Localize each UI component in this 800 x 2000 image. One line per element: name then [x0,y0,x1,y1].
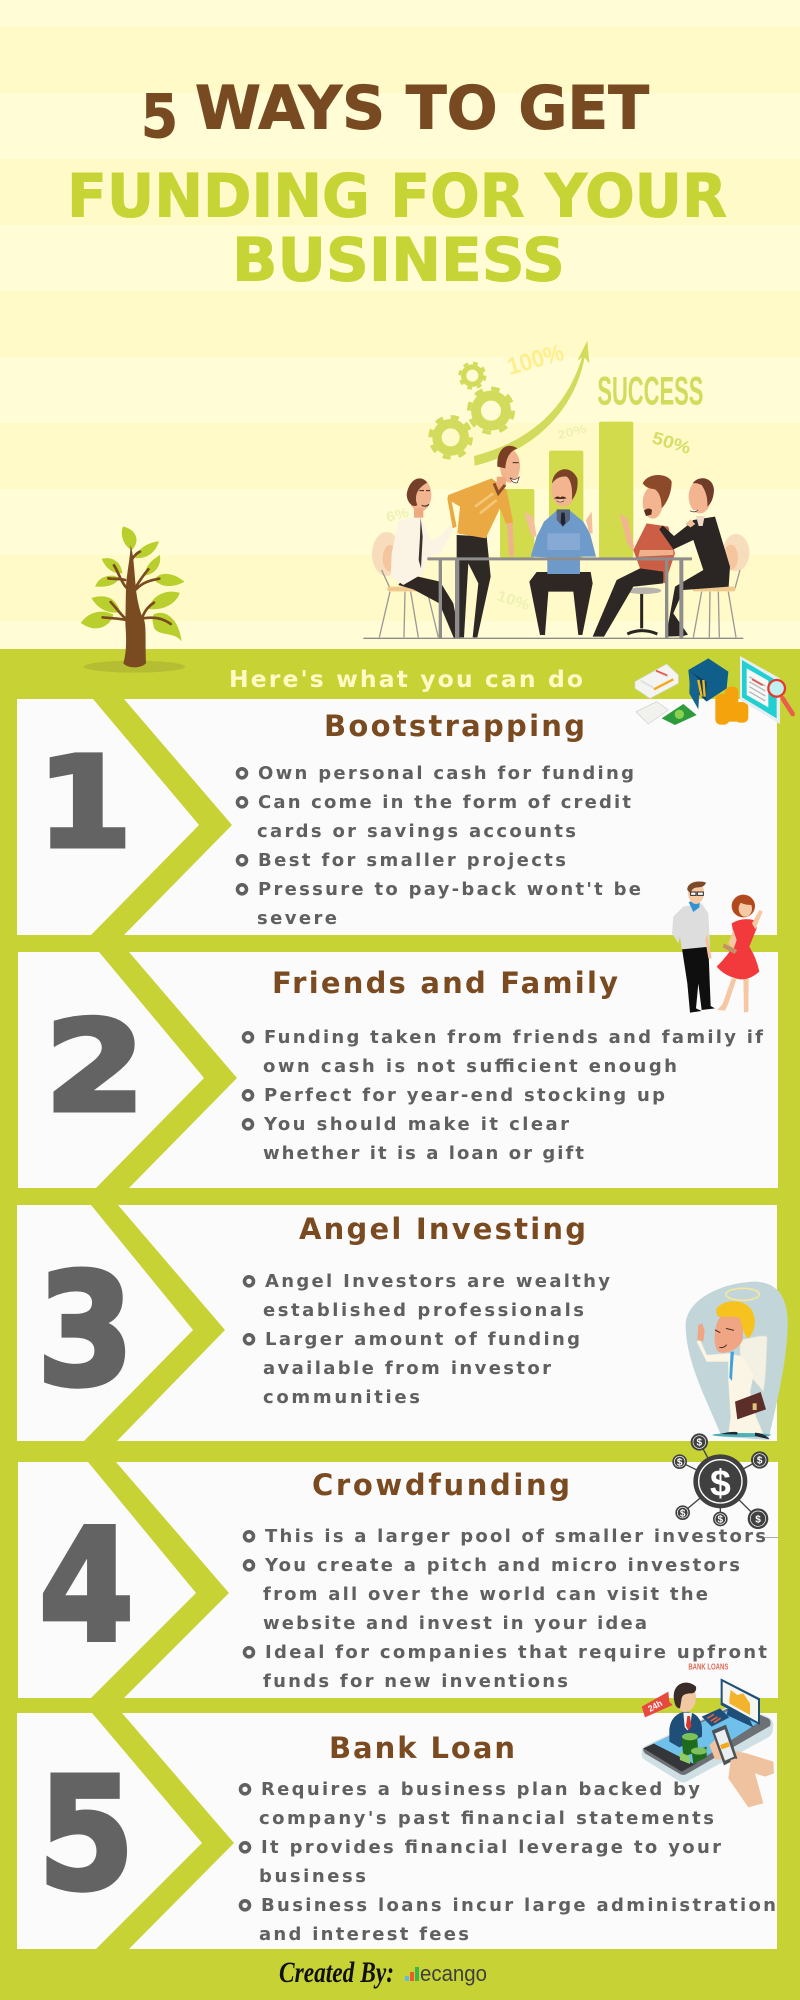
created by: Created By: [279,1956,394,1989]
chevron 3 [84,1205,225,1441]
money stacks [679,1733,707,1764]
small coins: $ [680,1508,686,1519]
24h flag: 24h [646,1698,664,1714]
banknote [662,704,697,725]
bullet list 1: Best for smaller projects [258,850,566,871]
title [67,74,727,296]
illustration: business meeting [363,339,749,639]
bullet list 2: Funding taken from friends and family if [264,1027,763,1048]
bullet list 3: Angel Investors are wealthy [265,1271,610,1292]
bullet list 5: and interest fees [259,1924,469,1945]
tree shadow [84,661,185,673]
right chair [693,534,749,637]
bullet list 5: business [259,1866,366,1887]
bullet list 4: This is a larger pool of smaller investors [265,1526,766,1547]
gears [430,363,513,458]
bullet list 1: cards or savings accounts [257,821,576,842]
woman [717,895,763,1013]
icon: bank loans phone [642,1662,774,1807]
panel 1: bootstrapping [17,699,777,935]
left chair [372,532,438,637]
man [672,881,715,1013]
safe [688,658,728,709]
phone body [642,1704,773,1782]
number 1: 1 [37,731,132,876]
heading: Crowdfunding: Crowdfunding [312,1468,570,1502]
bullet list 4: from all over the world can visit the [263,1584,708,1605]
bullet list 2: own cash is not sufficient enough [263,1056,677,1077]
connector lines [680,1442,760,1519]
floor line [363,638,743,639]
small coins [672,1433,768,1529]
tie [729,1352,734,1381]
bullet list 1 [238,763,641,929]
bullet list 1: severe [257,908,337,929]
small coins: $ [755,1514,761,1525]
title: 5 [141,82,178,152]
body [697,1339,763,1434]
coin stacks [715,687,748,725]
chevron 4 [88,1462,229,1698]
man in red shirt on stool [593,475,675,637]
bullet list 5: Requires a business plan backed by [261,1779,700,1800]
heading: Angel Investing: Angel Investing [299,1212,586,1246]
icon: couple [672,881,763,1013]
bullet list 3: Larger amount of funding [265,1329,580,1350]
green content area [0,649,800,2000]
raised hand [697,1323,705,1342]
bullet list 3: established professionals [263,1300,584,1321]
panel 2: friends and family [18,952,778,1188]
small coins: $ [718,1515,724,1526]
panel 5: bank loan [17,1713,777,1949]
man in white shirt [391,478,460,638]
bullet list 2: You should make it clear [263,1114,569,1135]
monitor [721,1678,760,1727]
chevron 2 [96,952,237,1188]
bullet list 3 [244,1271,610,1408]
bullet list 2: Perfect for year-end stocking up [264,1085,665,1106]
bullet list 3: available from investor [263,1358,551,1379]
chevron 5 [92,1713,234,1949]
bullet list 4 [244,1526,767,1692]
number 3: 3 [37,1240,134,1421]
panel 4: crowdfunding [18,1462,778,1698]
heading: Bank Loan: Bank Loan [329,1731,515,1765]
businessman [669,1683,702,1747]
subheading: Here's what you can do [229,665,583,693]
backdrop blob [686,1282,788,1440]
title: FUNDING FOR YOUR [67,162,727,232]
success label and percentages: SUCCESS [597,370,703,414]
heading: Friends and Family: Friends and Family [272,966,618,1000]
panel 3: angel investing [17,1205,777,1441]
bullet list 2 [244,1027,763,1164]
success label and percentages: 100% [504,339,567,381]
number 2: 2 [45,995,145,1140]
success label and percentages: 50% [650,427,693,458]
bullet list 1: Own personal cash for funding [258,763,634,784]
wing [740,1336,767,1392]
bullet list 4: Ideal for companies that require upfront [265,1642,767,1663]
growth arrow [474,341,589,466]
man in black suit [659,478,730,637]
briefcase [735,1392,766,1419]
tree [82,527,185,673]
bullet list 5: It provides financial leverage to your [261,1837,721,1858]
trunk and branches [103,545,171,667]
heading: Bootstrapping: Bootstrapping [324,709,585,743]
bullet list 5: company's past financial statements [259,1808,714,1829]
number 5: 5 [38,1744,134,1925]
table [427,557,692,638]
bullet list 2: whether it is a loan or gift [263,1143,584,1164]
halo [726,1288,759,1300]
bullet list 4: funds for new inventions [263,1671,568,1692]
central coin: $ [710,1461,731,1503]
bank loans label: BANK LOANS [688,1662,729,1671]
small coins: $ [677,1457,683,1468]
credit line [279,1956,487,1989]
success label and percentages [385,339,703,614]
documents [635,664,678,724]
bullet list 1: Can come in the form of credit [258,792,631,813]
bullet list 1: Pressure to pay-back wont't be [258,879,641,900]
tablet with magnifier [740,656,793,724]
leaves [82,527,183,639]
bullet list 4: website and invest in your idea [263,1613,647,1634]
bullet list 5 [240,1779,776,1945]
small coins: $ [697,1438,703,1449]
chart bars [500,422,633,558]
title: BUSINESS [232,226,565,296]
icon: documents, safe and coins [635,656,793,725]
small chart card [702,1708,729,1727]
24h flag [642,1692,673,1717]
number 4: 4 [39,1496,134,1676]
chevron 1 [91,699,232,935]
success label and percentages: 6% [385,504,411,525]
standing man in orange sweater [447,446,520,637]
striped cream background [0,0,800,650]
logo: ecango: ecango [420,1961,487,1986]
success label and percentages: 10% [495,588,532,614]
icon: dollar network [672,1433,768,1529]
success label and percentages: 20% [556,421,588,442]
shoes and shadow [712,1433,771,1437]
hands holding phone [709,1725,774,1807]
head [715,1301,755,1353]
icon: angel investor [686,1282,788,1440]
small coins: $ [757,1456,763,1467]
bullet list 5: Business loans incur large administration [261,1895,776,1916]
title: WAYS TO GET [195,74,649,144]
seated man in blue sweater [524,469,596,635]
bullet list 4: You create a pitch and micro investors [264,1555,740,1576]
bullet list 3: communities [263,1387,420,1408]
